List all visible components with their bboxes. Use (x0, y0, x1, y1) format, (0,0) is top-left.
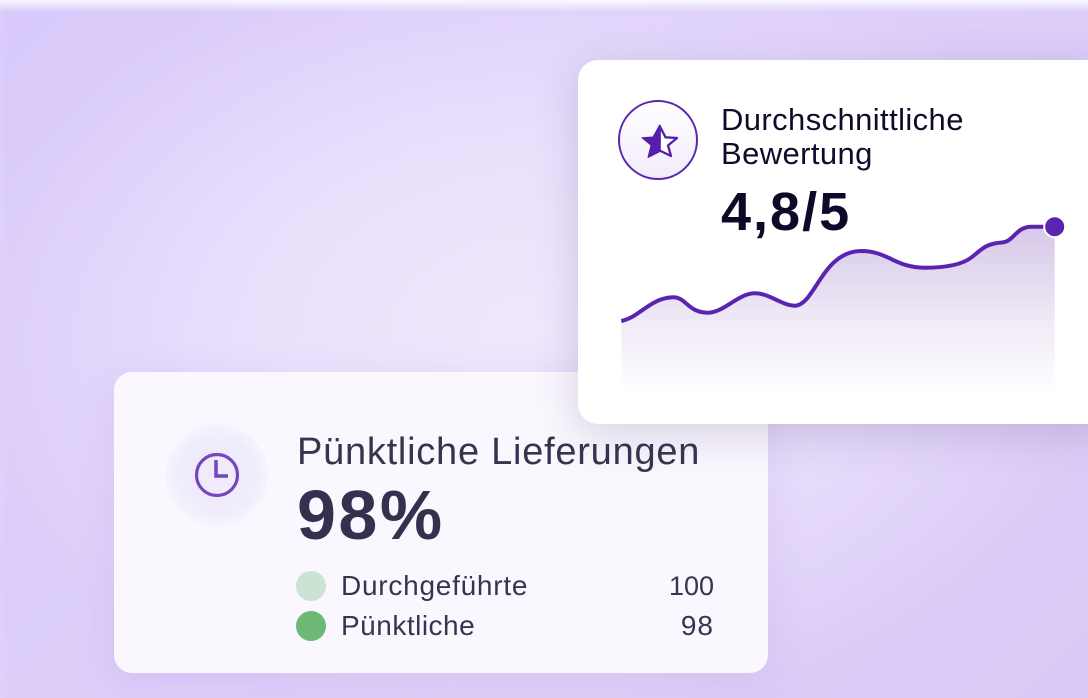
legend swatch: on time (296, 611, 326, 641)
chart area (621, 227, 1055, 395)
heading: average rating (721, 102, 964, 171)
value: 4,8/5: 4,8/5 (721, 182, 851, 242)
legend label: on time: Pünktliche (341, 610, 475, 641)
icon: clock (174, 432, 260, 518)
line chart: rating trend (620, 217, 1064, 366)
legend row: on time (296, 610, 714, 641)
legend row: completed (296, 570, 714, 601)
heading: average rating: Durchschnittliche (721, 102, 964, 137)
value: 98%: 98% (297, 476, 445, 554)
heading: on-time deliveries: Pünktliche Lieferungen (297, 431, 700, 473)
icon: half star (618, 100, 698, 180)
legend swatch: completed (296, 571, 326, 601)
panel: average rating card (578, 60, 1088, 424)
heading: average rating: Bewertung (721, 136, 873, 171)
chart end marker (1044, 216, 1065, 237)
legend value: completed: 100 (669, 571, 714, 601)
chart line (621, 227, 1055, 321)
legend value: on time: 98 (681, 610, 714, 641)
panel: on-time deliveries card (114, 372, 768, 673)
legend label: completed: Durchgeführte (341, 570, 528, 601)
